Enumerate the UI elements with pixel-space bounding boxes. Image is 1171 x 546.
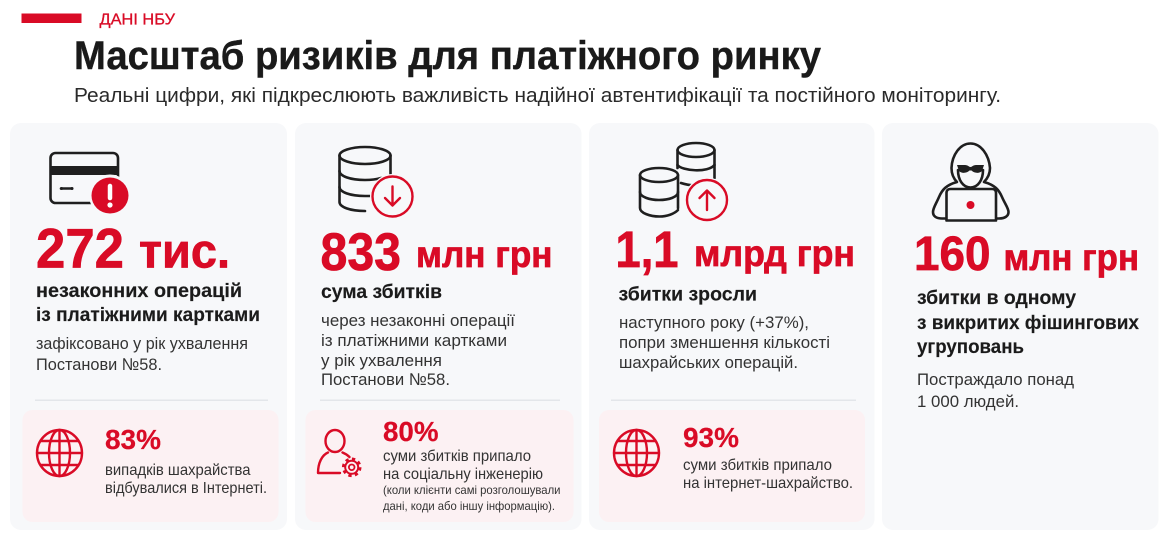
callout text — [683, 457, 853, 492]
subheading — [36, 280, 260, 326]
big number — [36, 216, 230, 280]
description: зафіксовано у рік ухвалення — [36, 334, 248, 353]
subheading — [917, 287, 1139, 358]
description: попри зменшення кількості — [619, 333, 830, 352]
callout: 83 percent — [22, 410, 278, 522]
header — [22, 12, 1001, 107]
callout text: на соціальну інженерію — [383, 466, 543, 483]
subheading: з викритих фішингових — [917, 312, 1139, 334]
callout text: суми збитків припало — [383, 448, 531, 465]
callout text: дані, коди або іншу інформацію). — [383, 499, 555, 513]
callout text: випадків шахрайства — [105, 462, 251, 479]
eyebrow label: ДАНІ НБУ — [100, 12, 176, 28]
description — [917, 370, 1074, 411]
big number: 1,1 — [616, 221, 678, 278]
callout text — [383, 448, 560, 513]
description: шахрайських операцій. — [619, 353, 798, 372]
callout: 80 percent — [306, 410, 574, 522]
panel: 160 million phishing group — [882, 123, 1158, 530]
description — [36, 334, 248, 374]
callout text — [105, 462, 267, 497]
subheading: збитки в одному — [917, 287, 1076, 309]
big number — [320, 223, 552, 282]
statistic: 83% — [105, 424, 161, 455]
subtitle: Реальні цифри, які підкреслюють важливість надійної автентифікації та постійного моніторингу. — [74, 85, 1001, 107]
description: Постанови №58. — [36, 355, 162, 374]
subheading: угруповань — [917, 336, 1024, 358]
description: Постанови №58. — [321, 370, 450, 389]
description: із платіжними картками — [321, 331, 507, 350]
description: 1 000 людей. — [917, 392, 1019, 411]
icon: coin stacks with up arrow — [640, 143, 730, 222]
title: Масштаб ризиків для платіжного ринку — [74, 34, 822, 78]
panel: 272 thousand operations — [10, 123, 287, 530]
callout text: суми збитків припало — [683, 457, 832, 474]
description: у рік ухвалення — [321, 351, 442, 370]
big number: 833 — [320, 223, 401, 282]
big number — [914, 228, 1139, 281]
icon: person with gear — [318, 430, 360, 476]
big number: млрд грн — [694, 233, 855, 274]
icon: database with down arrow — [340, 147, 415, 219]
description — [619, 313, 830, 372]
panel: 833 million losses — [295, 123, 582, 530]
description: Постраждало понад — [917, 370, 1074, 389]
icon: bank card with alert — [50, 153, 131, 216]
icon: hooded hacker with laptop — [933, 144, 1008, 220]
statistic: 93% — [683, 422, 739, 453]
icon: globe — [614, 430, 659, 476]
accent bar — [22, 14, 82, 23]
big number: тис. — [139, 226, 230, 278]
description — [321, 311, 515, 389]
subheading: незаконних операцій — [36, 280, 242, 302]
callout: 93 percent — [599, 410, 865, 522]
panel: 1.1 billion losses — [589, 123, 874, 530]
icon: globe — [37, 430, 82, 476]
big number: млн грн — [416, 234, 552, 275]
subheading: збитки зросли — [618, 284, 757, 306]
subheading: сума збитків — [321, 281, 442, 303]
callout text: на інтернет-шахрайство. — [683, 475, 853, 492]
statistic: 80% — [383, 416, 439, 447]
description: через незаконні операції — [321, 311, 515, 330]
subheading: із платіжними картками — [36, 304, 260, 326]
description: наступного року (+37%), — [619, 313, 809, 332]
big number: 160 — [914, 228, 990, 281]
big number: млн грн — [1004, 237, 1139, 278]
big number: 272 — [36, 216, 124, 280]
callout text: відбувалися в Інтернеті. — [105, 480, 267, 497]
big number — [616, 221, 855, 278]
callout text: (коли клієнти самі розголошували — [383, 483, 560, 497]
